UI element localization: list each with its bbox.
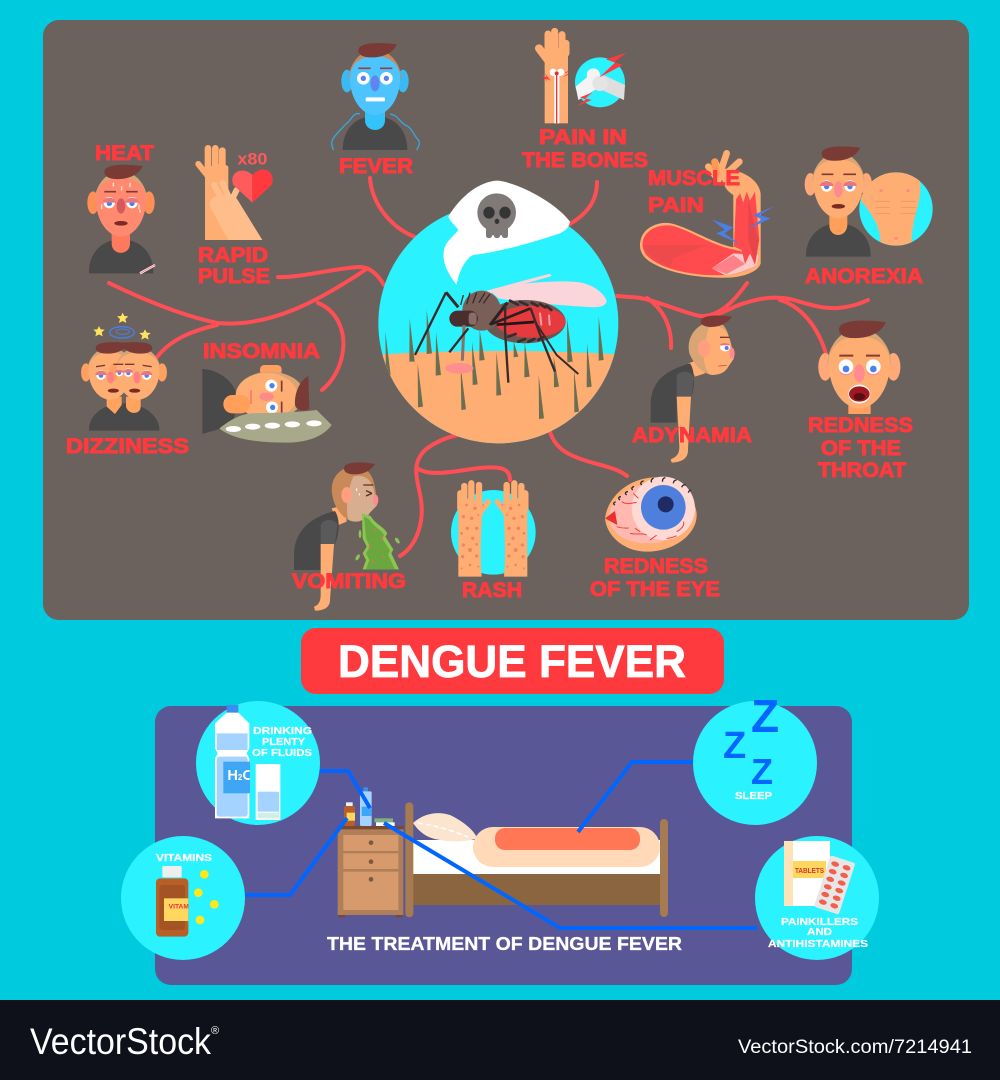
symptom: dizziness bbox=[66, 313, 189, 458]
label: VITAMINS bbox=[156, 853, 212, 864]
label: PLENTY bbox=[262, 737, 305, 748]
label: FEVER bbox=[339, 155, 413, 178]
footer watermark bar: VectorStock.com/7214941 bbox=[738, 1037, 972, 1058]
label bbox=[252, 726, 312, 759]
icon: vomiting man bbox=[294, 462, 401, 611]
symptom: pain in the bones bbox=[522, 31, 648, 172]
icon: thin man and torso bbox=[805, 146, 933, 257]
icon: weak stooped man bbox=[651, 315, 735, 463]
label: AND bbox=[807, 927, 832, 938]
symptom: insomnia bbox=[202, 340, 332, 443]
heart rate: x80 bbox=[237, 149, 267, 168]
mosquito bbox=[415, 274, 607, 383]
icon: hands with rash bbox=[451, 483, 536, 577]
icon: feverish man bbox=[87, 165, 155, 273]
symptom: muscle pain bbox=[640, 153, 775, 278]
icon: muscular arm bbox=[640, 153, 775, 278]
footer watermark bar: VectorStock bbox=[30, 1021, 211, 1062]
label: THROAT bbox=[818, 459, 906, 482]
label bbox=[522, 126, 648, 172]
icon: sleeping Z letters bbox=[723, 690, 779, 792]
label: OF THE bbox=[821, 437, 901, 460]
icon: water bottle and glass: H2O bbox=[227, 768, 254, 784]
label: ANTIHISTAMINES bbox=[768, 939, 868, 950]
icon: man lying awake bbox=[202, 365, 332, 443]
icon: blue shivering man bbox=[332, 43, 419, 150]
icon: vitamin bottle: VITAMIN bbox=[169, 904, 196, 911]
treatment: sleep bbox=[693, 690, 817, 825]
icon: arm and bone bbox=[539, 31, 627, 123]
footer watermark bar bbox=[0, 1000, 1000, 1080]
label: REDNESS bbox=[604, 555, 708, 578]
icon: sleeping Z letters: Z bbox=[723, 725, 746, 767]
label bbox=[768, 917, 868, 950]
poison cloud with skull bbox=[444, 181, 570, 285]
label: DRINKING bbox=[253, 726, 312, 737]
icon: sleeping Z letters: Z bbox=[751, 690, 779, 742]
label: REDNESS bbox=[808, 414, 913, 437]
icon: skull bbox=[477, 193, 516, 238]
symptom: anorexia bbox=[805, 146, 933, 288]
icon: bloodshot eye bbox=[605, 477, 697, 552]
treatment: vitamins bbox=[121, 836, 245, 960]
label: DIZZINESS bbox=[66, 435, 189, 458]
icon: man with open mouth bbox=[818, 321, 900, 414]
label: OF THE EYE bbox=[590, 578, 720, 601]
symptom: adynamia bbox=[632, 315, 752, 463]
label: VOMITING bbox=[292, 570, 406, 593]
label: PAINKILLERS bbox=[781, 917, 858, 928]
title banner bbox=[301, 628, 724, 694]
symptom: vomiting bbox=[292, 462, 406, 611]
connector lines bbox=[245, 762, 757, 928]
label: RAPID bbox=[198, 244, 268, 267]
label bbox=[808, 414, 913, 482]
icon: double-vision man bbox=[81, 313, 167, 431]
label: PAIN bbox=[648, 194, 704, 217]
label: HEAT bbox=[95, 142, 154, 165]
panel: treatment bbox=[121, 690, 879, 985]
label bbox=[198, 244, 270, 288]
symptom: heat bbox=[87, 142, 155, 273]
label: THE BONES bbox=[522, 149, 648, 172]
footer watermark bar: ® bbox=[211, 1025, 219, 1037]
title banner: DENGUE FEVER bbox=[338, 636, 686, 687]
symptom: rapid pulse bbox=[198, 148, 273, 288]
central illustration: mosquito on skin bbox=[370, 181, 630, 450]
label: RASH bbox=[462, 579, 522, 602]
bed and nightstand bbox=[338, 787, 668, 917]
label bbox=[590, 555, 720, 601]
connector lines bbox=[109, 178, 868, 556]
bite mark bbox=[445, 363, 473, 374]
treatment: drinking fluids bbox=[196, 701, 320, 825]
treatment: painkillers bbox=[755, 836, 879, 960]
label: ADYNAMIA bbox=[632, 424, 752, 447]
label: INSOMNIA bbox=[203, 340, 320, 363]
label: ANOREXIA bbox=[805, 265, 923, 288]
label: SLEEP bbox=[735, 791, 772, 802]
label: MUSCLE bbox=[648, 167, 740, 190]
icon: sleeping Z letters: Z bbox=[751, 751, 773, 792]
symptom: redness of the throat bbox=[808, 321, 913, 482]
label: PULSE bbox=[198, 265, 270, 288]
label: OF FLUIDS bbox=[252, 748, 312, 759]
symptom: fever bbox=[332, 43, 419, 178]
symptom: rash bbox=[451, 483, 536, 602]
treatment heading: THE TREATMENT OF DENGUE FEVER bbox=[327, 934, 682, 954]
symptom: redness of the eye bbox=[590, 477, 720, 601]
label: PAIN IN bbox=[539, 126, 627, 149]
label bbox=[648, 167, 740, 217]
icon: tablets box and blister pack: TABLETS bbox=[795, 866, 824, 875]
panel: symptoms bbox=[43, 20, 969, 620]
